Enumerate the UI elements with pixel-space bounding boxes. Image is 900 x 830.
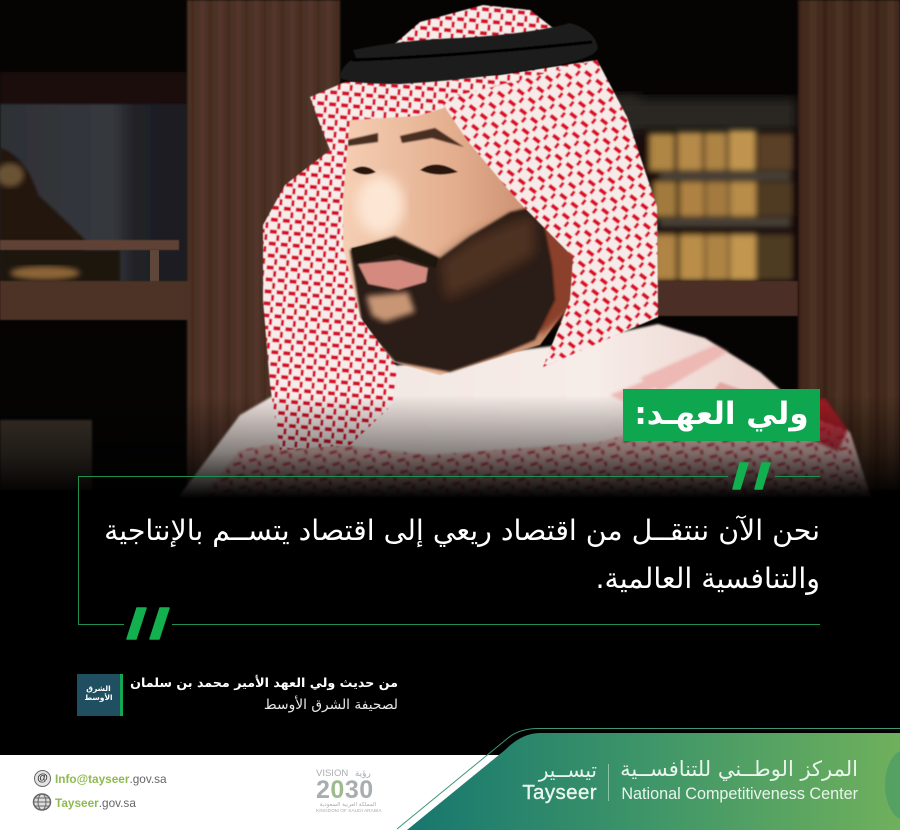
logo: Tayseer: Tayseer	[522, 781, 597, 804]
organisation name: المركز الوطــني للتنافســية	[620, 757, 858, 781]
logo: Vision 2030: 2030	[316, 776, 374, 804]
logo: Vision 2030: المملكة العربية السعودية	[320, 802, 376, 808]
quote text: نحن الآن ننتقــل من اقتصاد ريعي إلى اقتصاد يتســم بالإنتاجية	[104, 514, 820, 547]
icon: email	[34, 770, 51, 787]
logo: Tayseer: تيســير	[539, 758, 597, 782]
person: robe	[180, 324, 872, 510]
footer: green banner with diagonal edge	[396, 728, 900, 830]
source logo: Asharq Al-Awsat: الشرق	[86, 684, 111, 693]
background: shelves	[0, 0, 900, 490]
contact: website: Tayseer.gov.sa	[55, 796, 136, 810]
source attribution: من حديث ولي العهد الأمير محمد بن سلمان	[130, 675, 398, 690]
source logo: Asharq Al-Awsat: الأوسط	[84, 693, 113, 702]
divider	[608, 764, 609, 801]
contact: email: Info@tayseer.gov.sa	[55, 772, 167, 786]
icon: email: @	[37, 772, 48, 784]
quote text	[104, 514, 820, 595]
photo: portrait in front of a bookshelf	[0, 0, 900, 496]
heading badge	[623, 389, 820, 441]
icon: opening quotation mark	[732, 462, 771, 490]
person: ghutra headdress	[263, 5, 658, 450]
footer: white contact bar	[0, 755, 900, 830]
source logo: Asharq Al-Awsat	[77, 674, 123, 716]
source attribution: لصحيفة الشرق الأوسط	[264, 697, 398, 713]
source attribution	[130, 674, 398, 713]
logo: Vision 2030: KINGDOM OF SAUDI ARABIA	[316, 809, 382, 814]
quote text: والتنافسية العالمية.	[595, 562, 820, 595]
logo: Vision 2030	[316, 768, 382, 814]
person: black igal band	[340, 23, 598, 84]
quote frame lines	[78, 476, 820, 625]
logo: Tayseer	[522, 758, 597, 804]
logo: Vision 2030: VISION رؤية	[316, 768, 371, 779]
photo fade to black	[0, 395, 900, 510]
heading badge: ولي العهـد:	[634, 396, 809, 432]
icon: closing quotation mark	[126, 607, 170, 640]
person: face and beard	[340, 102, 580, 375]
organisation name	[620, 757, 858, 803]
icon: globe	[32, 793, 52, 811]
organisation name: National Competitiveness Center	[621, 785, 858, 803]
